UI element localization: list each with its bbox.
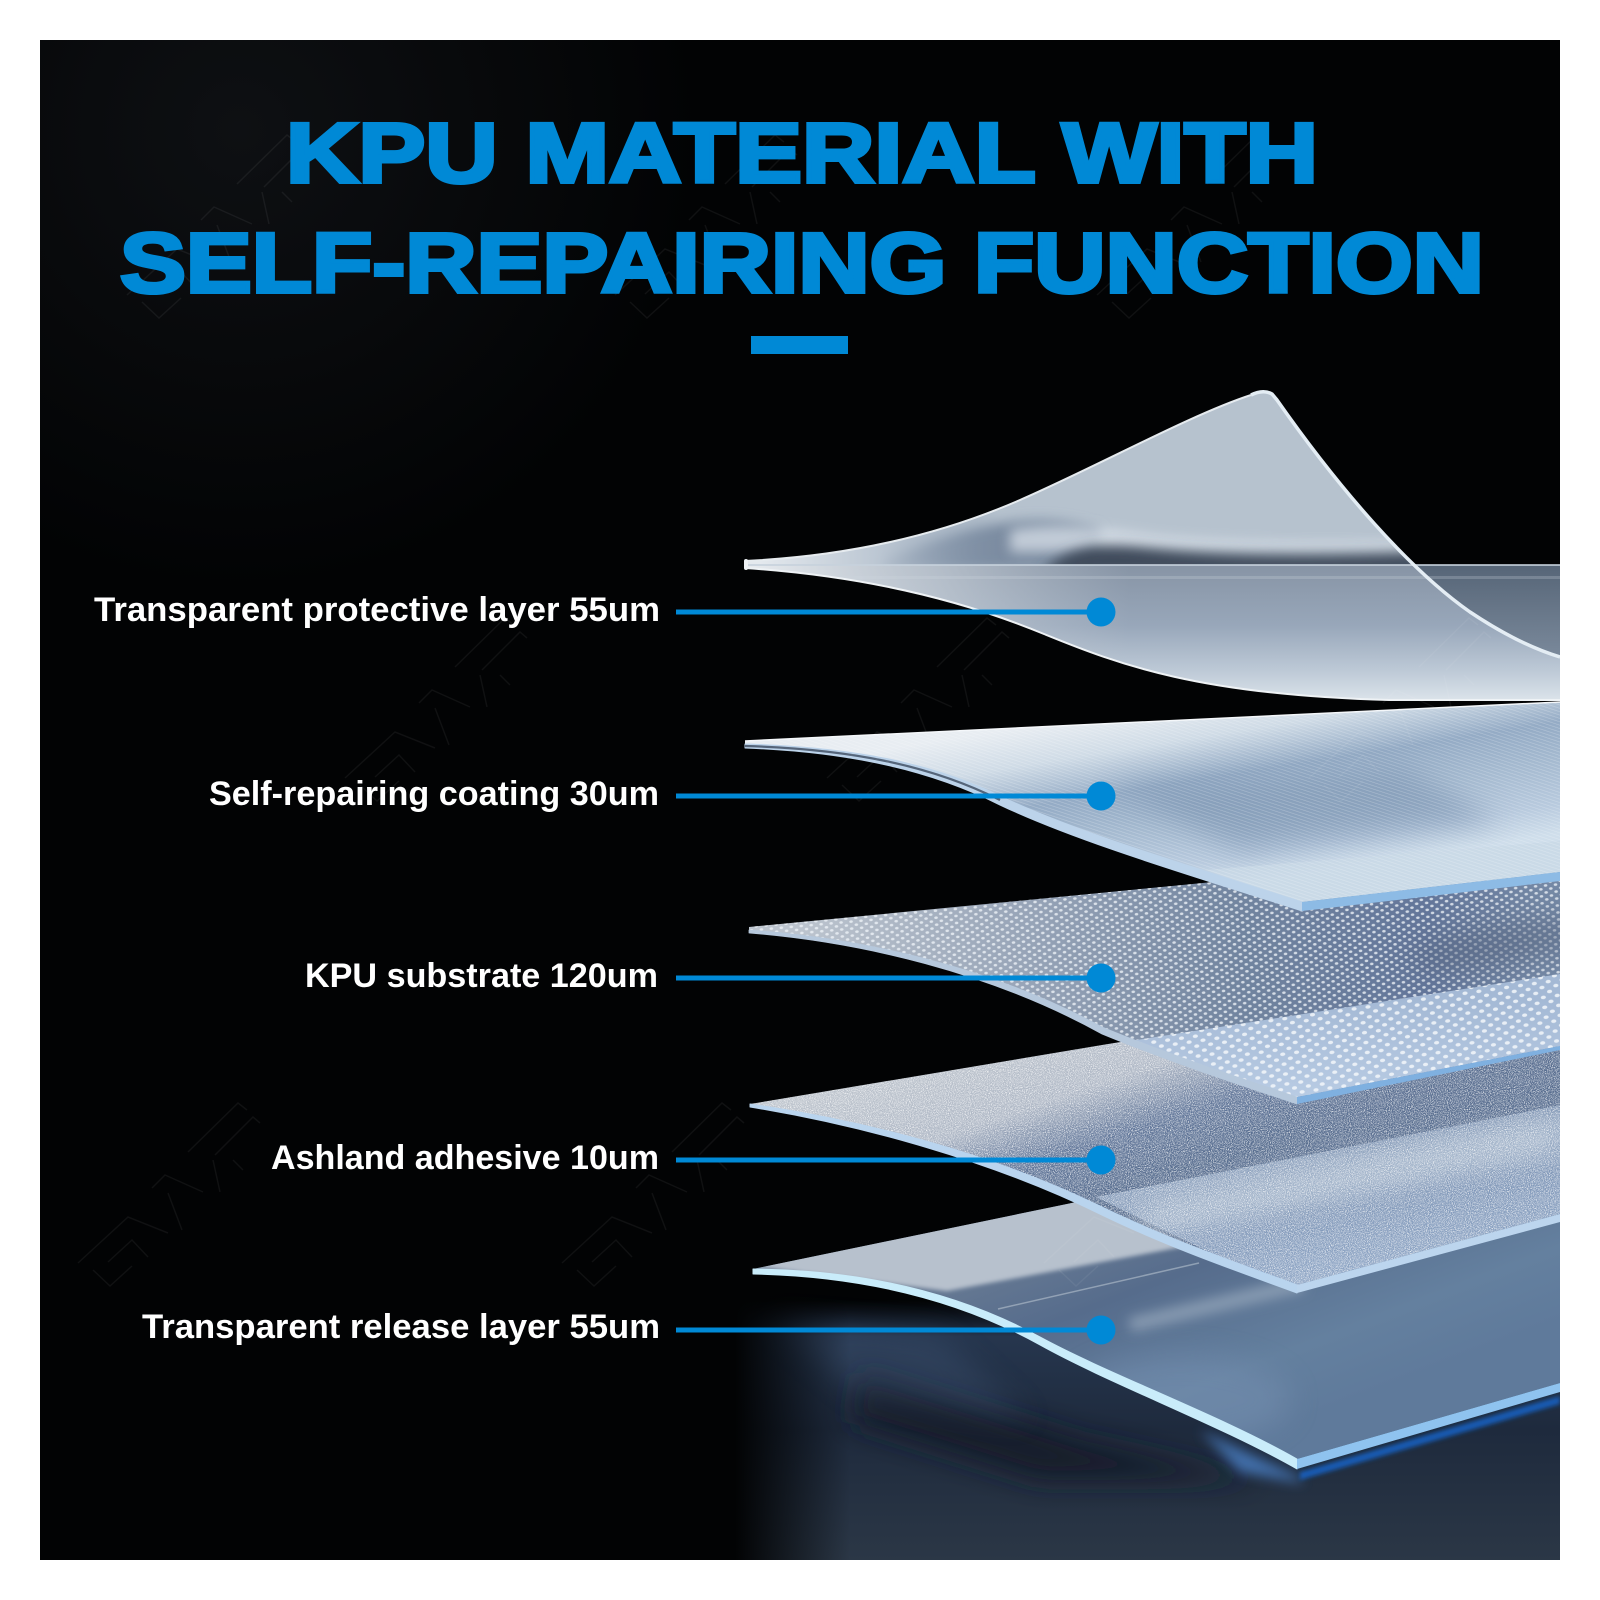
layer 2: self-repairing coating — [740, 695, 1570, 911]
callout: KPU substrate — [305, 957, 1116, 995]
layer 4: adhesive layer — [750, 1042, 1560, 1294]
layer 3: KPU substrate — [748, 872, 1560, 1104]
reflective floor — [735, 1290, 1565, 1560]
label: Self-repairing coating 30um — [209, 775, 659, 813]
label: Ashland adhesive 10um — [271, 1139, 659, 1177]
dot — [1086, 1316, 1116, 1344]
watermark logos — [78, 135, 1491, 1286]
leader line — [676, 1328, 1101, 1332]
label: Transparent release layer 55um — [142, 1308, 660, 1346]
callout: transparent release layer — [142, 1308, 1116, 1346]
title — [120, 106, 1484, 310]
leader line — [676, 794, 1101, 798]
title line 1: KPU MATERIAL WITH — [286, 106, 1318, 200]
dot — [1086, 1146, 1116, 1174]
title accent bar — [751, 336, 848, 354]
leader line — [676, 610, 1101, 614]
leader line — [676, 976, 1101, 980]
callout: transparent protective layer — [94, 591, 1116, 629]
leader line — [676, 1158, 1101, 1162]
callout: self-repairing coating — [209, 775, 1116, 813]
label: KPU substrate 120um — [305, 957, 658, 995]
dot — [1086, 964, 1116, 992]
dot — [1086, 782, 1116, 810]
callout: Ashland adhesive — [271, 1139, 1116, 1177]
layer 1: transparent protective layer — [740, 385, 1570, 705]
label: Transparent protective layer 55um — [94, 591, 660, 629]
layer 5: transparent release layer — [752, 1202, 1560, 1470]
dot — [1086, 598, 1116, 626]
title line 2: SELF-REPAIRING FUNCTION — [120, 216, 1484, 310]
